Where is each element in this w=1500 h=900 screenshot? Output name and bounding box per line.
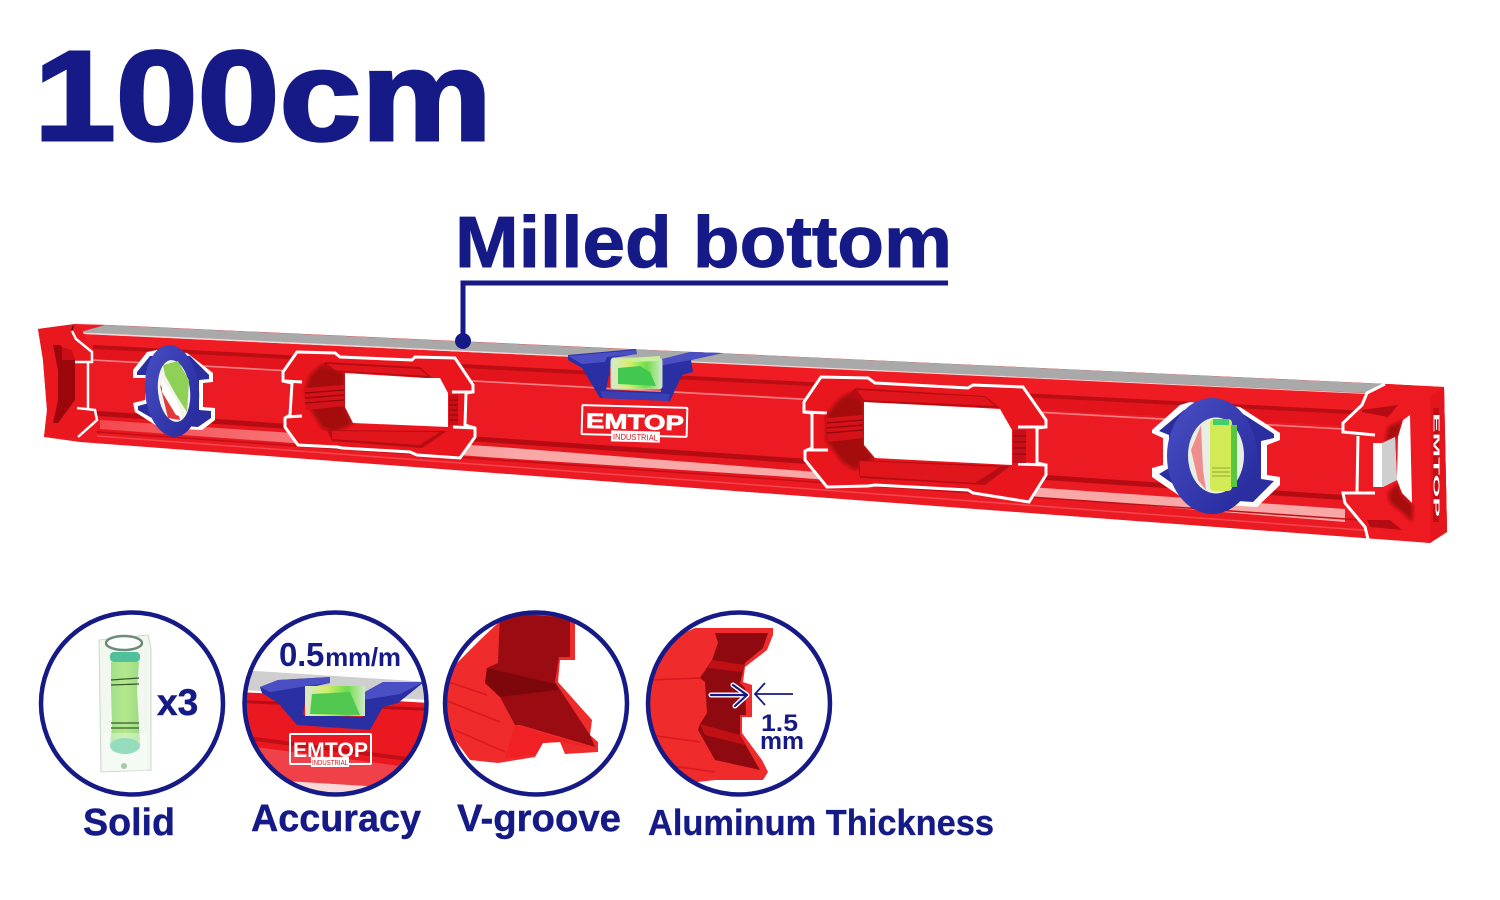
spirit level product <box>38 324 1447 543</box>
feature: aluminum thickness <box>645 612 994 843</box>
right handle window <box>864 402 1012 465</box>
label mm: mm <box>760 728 804 755</box>
circle outline <box>648 612 830 794</box>
EMTOP logo: INDUSTRIAL <box>613 431 658 443</box>
right end cap <box>1343 384 1447 543</box>
label 0.5mm/m: 0.5mm/m <box>279 636 401 673</box>
centre vial <box>568 349 723 401</box>
circle clipped close-up <box>246 670 424 792</box>
right handle <box>804 377 1046 502</box>
logo in close-up: INDUSTRIAL <box>312 758 348 767</box>
label 1.5: 1.5 <box>761 710 798 737</box>
callout heading: Milled bottom <box>455 203 952 283</box>
label Accuracy: Accuracy <box>251 798 421 840</box>
label Solid: Solid <box>83 802 175 844</box>
left handle <box>283 352 475 458</box>
arrow: outside wall <box>755 683 793 705</box>
label Aluminum Thickness: Aluminum Thickness <box>648 802 994 843</box>
left end cap <box>38 324 97 438</box>
left vial <box>133 343 215 439</box>
top grey milled strip <box>77 325 1385 393</box>
centre vial bubble <box>611 358 662 389</box>
level body <box>38 324 1447 543</box>
feature: solid vial x3 <box>41 612 223 844</box>
arrow: inside wall <box>711 685 747 706</box>
logo in close-up: EMTOP <box>293 739 368 762</box>
label x3: x3 <box>157 682 198 723</box>
close-up profile <box>440 610 598 763</box>
EMTOP logo <box>582 405 687 443</box>
callout: Milled bottom <box>455 203 952 349</box>
left handle window <box>345 373 448 427</box>
feature: accuracy <box>240 610 435 840</box>
EMTOP logo: EMTOP <box>586 410 684 435</box>
end cap logo <box>1432 408 1442 522</box>
right vial <box>1152 398 1280 514</box>
label V-groove: V-groove <box>457 798 621 840</box>
circle outline <box>244 612 426 794</box>
title: 100cm: 100cm <box>34 25 492 168</box>
circle <box>41 612 223 794</box>
circle outline <box>445 612 627 794</box>
end cap logo: EMTOP <box>1432 413 1442 518</box>
close-up profile <box>645 628 773 782</box>
callout dot <box>455 333 471 349</box>
feature: v-groove <box>440 610 627 840</box>
logo in close-up <box>290 734 371 767</box>
icon: glass vial <box>99 635 151 772</box>
callout leader line <box>463 283 948 341</box>
